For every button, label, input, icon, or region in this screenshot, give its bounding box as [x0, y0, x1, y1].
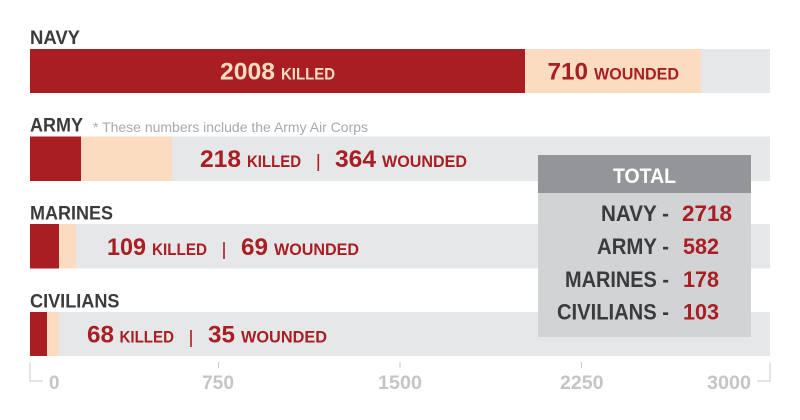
axis label 1500: 1500 — [378, 373, 422, 394]
navy total value: 2718 — [682, 201, 732, 226]
marines killed label: 109 — [107, 234, 146, 261]
panel: totals — [538, 155, 751, 337]
army row: WOUNDED — [382, 153, 467, 171]
marines row: WOUNDED — [274, 241, 359, 259]
civilians row: WOUNDED — [241, 328, 327, 346]
army track — [30, 136, 770, 181]
axis label 0: 0 — [49, 373, 60, 394]
axis label 750: 750 — [202, 373, 234, 394]
navy wounded unit: WOUNDED — [594, 66, 679, 84]
navy killed unit: KILLED — [281, 66, 335, 84]
civilians killed bar — [30, 312, 47, 356]
civilians total label: CIVILIANS - — [557, 300, 669, 324]
army row — [30, 116, 770, 181]
civilians heading: CIVILIANS — [30, 292, 120, 312]
navy killed bar — [30, 49, 525, 93]
navy wounded label: 710 — [548, 58, 588, 86]
navy wounded bar — [525, 49, 701, 93]
marines heading: MARINES — [30, 204, 113, 224]
navy row — [30, 28, 770, 93]
marines total label: MARINES - — [565, 267, 669, 292]
marines row — [30, 204, 770, 268]
civilians track — [30, 312, 770, 356]
navy heading: NAVY — [30, 28, 80, 49]
navy total label: NAVY - — [601, 201, 669, 226]
navy track — [30, 49, 770, 93]
civilians row — [30, 292, 770, 356]
civilians wounded label: 35 — [208, 322, 235, 348]
marines track — [30, 224, 770, 268]
totals body — [538, 193, 751, 337]
marines wounded label: 69 — [241, 234, 268, 261]
army wounded label: 364 — [335, 146, 377, 173]
totals header — [538, 155, 751, 193]
army heading: ARMY — [30, 116, 83, 136]
axis label 2250: 2250 — [560, 373, 604, 394]
army total value: 582 — [683, 234, 719, 259]
navy killed label: 2008 — [220, 58, 275, 86]
army killed label: 218 — [200, 146, 241, 173]
civilians killed label: 68 — [87, 322, 114, 348]
marines total value: 178 — [683, 267, 719, 292]
marines wounded bar — [59, 224, 76, 268]
civilians row: KILLED — [120, 328, 174, 346]
x axis — [30, 362, 770, 394]
civilians wounded bar — [47, 312, 59, 356]
army wounded bar — [81, 136, 172, 181]
army killed bar — [30, 136, 81, 181]
axis label 3000: 3000 — [707, 373, 751, 394]
marines row: KILLED — [152, 241, 207, 259]
army footnote: * These numbers include the Army Air Corps — [93, 119, 368, 135]
totals heading: TOTAL — [613, 165, 676, 188]
army total label: ARMY - — [597, 234, 669, 259]
civilians total value: 103 — [683, 300, 719, 324]
marines killed bar — [30, 224, 59, 268]
army row: KILLED — [247, 153, 301, 171]
